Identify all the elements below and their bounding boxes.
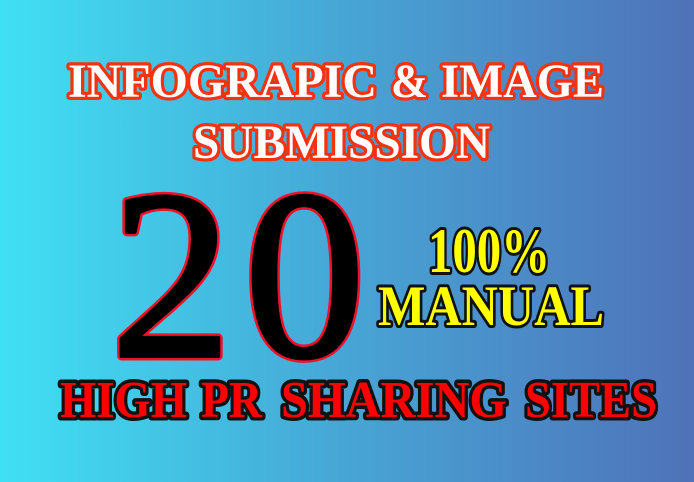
subtitle: high PR sharing sites: SITES <box>525 372 657 429</box>
subtitle: high PR sharing sites: SHARING <box>281 372 507 429</box>
MANUAL label: MANUAL <box>378 275 604 338</box>
big number 20: 20 <box>111 142 365 409</box>
title line 1 <box>68 55 604 108</box>
subtitle: high PR sharing sites <box>60 372 657 429</box>
title line 1: IMAGE <box>441 55 604 108</box>
subtitle: high PR sharing sites: PR <box>201 372 263 429</box>
title line 1: INFOGRAPIC <box>68 55 377 108</box>
big number 20: 20 <box>111 142 365 409</box>
subtitle: high PR sharing sites: HIGH <box>60 372 187 429</box>
title line 1: & <box>391 55 428 108</box>
100% label: 100% <box>428 216 550 286</box>
title line 2: SUBMISSION <box>193 116 490 169</box>
